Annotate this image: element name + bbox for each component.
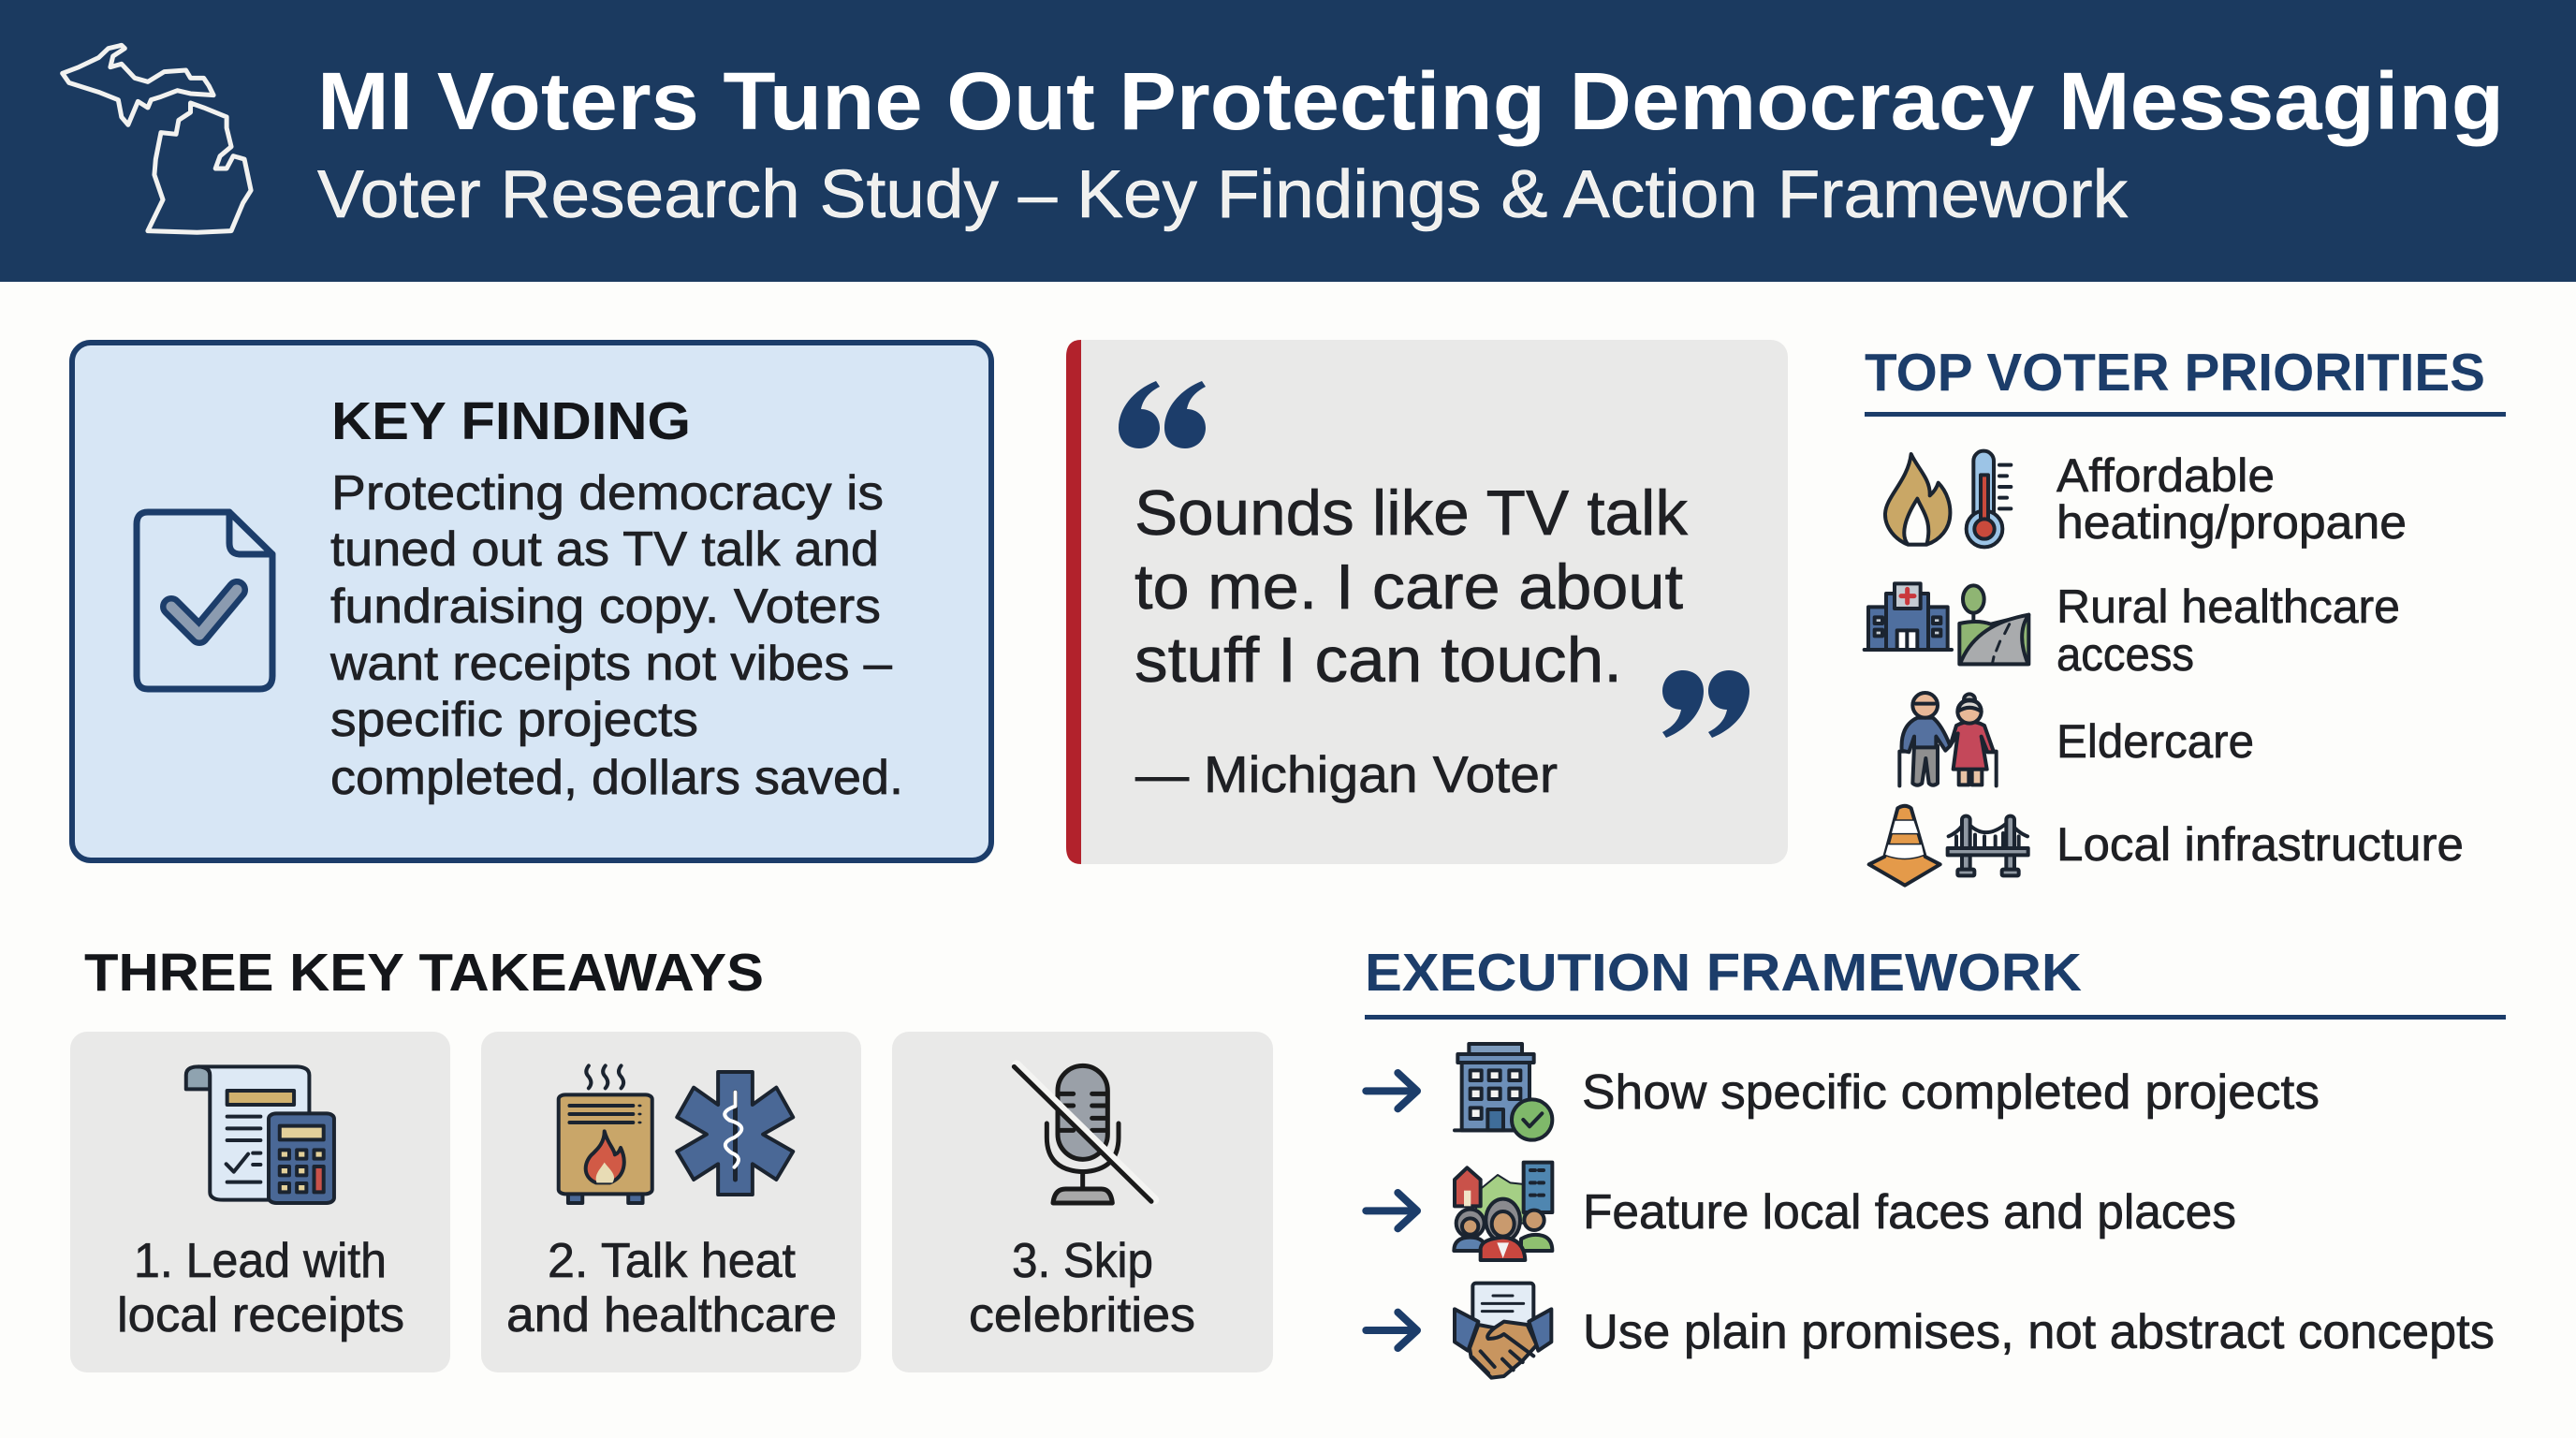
heading: top voter priorities: TOP VOTER PRIORITIES — [1865, 343, 2485, 403]
arrow 2 — [1366, 1193, 1417, 1228]
text: affordable heating — [2056, 449, 2407, 549]
text: takeaway 3 — [969, 1234, 1195, 1343]
text: affordable heating: Affordable — [2056, 449, 2275, 502]
icon: opening quotation mark — [1119, 381, 1206, 448]
quote attribution: — Michigan Voter — [1135, 745, 1558, 803]
text block: key finding body: Protecting democracy is — [331, 466, 884, 521]
text: local infrastructure: Local infrastructure — [2056, 818, 2464, 871]
arrow 3 — [1366, 1313, 1417, 1348]
text: rural healthcare: access — [2056, 628, 2194, 681]
icons: hospital and rural road — [1865, 583, 2028, 664]
panel: voter quote — [1066, 340, 1788, 864]
text block: key finding body: fundraising copy. Voters — [330, 580, 881, 634]
icon: local people and places — [1454, 1163, 1552, 1260]
text block: key finding body: completed, dollars saved. — [330, 751, 903, 805]
text: takeaway 1 — [117, 1234, 404, 1343]
text: takeaway 2: and healthcare — [506, 1288, 837, 1343]
card: talk heat and healthcare — [481, 1032, 861, 1372]
text block: key finding body: tuned out as TV talk and — [330, 522, 879, 577]
text block: quote: stuff I can touch. — [1134, 624, 1622, 696]
text block: quote: Sounds like TV talk — [1134, 477, 1689, 549]
title: MI Voters Tune Out Protecting Democracy Messaging — [317, 56, 2504, 147]
panel: key finding — [72, 343, 991, 860]
icon: handshake and document — [1455, 1284, 1551, 1378]
text: execution step 1: Show specific completed projects — [1582, 1065, 2320, 1120]
icon: heater and star of life — [559, 1065, 793, 1203]
text: execution step 2: Feature local faces and places — [1583, 1185, 2236, 1240]
text: takeaway 1: local receipts — [117, 1288, 404, 1343]
icons: flame and thermometer — [1885, 451, 2011, 547]
heading: three key takeaways: THREE KEY TAKEAWAYS — [84, 943, 764, 1003]
text: takeaway 2: 2. Talk heat — [548, 1234, 797, 1288]
header banner — [0, 0, 2576, 282]
text: affordable heating: heating/propane — [2056, 496, 2407, 549]
card: skip celebrities — [892, 1032, 1273, 1372]
text: takeaway 1: 1. Lead with — [134, 1234, 387, 1288]
icon: Michigan outline — [63, 45, 251, 232]
icon: crossed-out microphone — [1014, 1064, 1154, 1203]
icon: building with check — [1455, 1044, 1552, 1140]
text: takeaway 3: 3. Skip — [1012, 1234, 1153, 1288]
text: rural healthcare: Rural healthcare — [2056, 580, 2400, 633]
panel: execution framework — [1365, 943, 2506, 1378]
panel: three key takeaways — [70, 943, 1273, 1372]
heading: key finding: KEY FINDING — [331, 391, 691, 451]
icon: receipt and calculator — [186, 1066, 334, 1203]
text: execution step 3: Use plain promises, not abstract concepts — [1583, 1305, 2495, 1359]
text: eldercare: Eldercare — [2056, 715, 2254, 768]
panel: top voter priorities — [1865, 343, 2506, 886]
text block: quote: to me. I care about — [1134, 551, 1683, 623]
heading: execution framework: EXECUTION FRAMEWORK — [1365, 943, 2082, 1003]
icons: traffic cone and bridge — [1869, 806, 2028, 886]
text block: key finding body: want receipts not vibes – — [329, 637, 892, 691]
text block: quote — [1134, 477, 1689, 696]
text: rural healthcare — [2056, 580, 2400, 681]
text block: key finding body: specific projects — [330, 693, 698, 747]
card: lead with local receipts — [70, 1032, 450, 1372]
subtitle: Voter Research Study – Key Findings & Action Framework — [317, 157, 2129, 232]
icon: document with check — [137, 512, 272, 689]
text block: key finding body — [329, 466, 903, 805]
arrow 1 — [1366, 1073, 1417, 1108]
icons: elderly couple — [1899, 693, 1997, 785]
text: takeaway 3: celebrities — [969, 1288, 1195, 1343]
text: takeaway 2 — [506, 1234, 837, 1343]
icon: closing quotation mark — [1662, 670, 1749, 738]
